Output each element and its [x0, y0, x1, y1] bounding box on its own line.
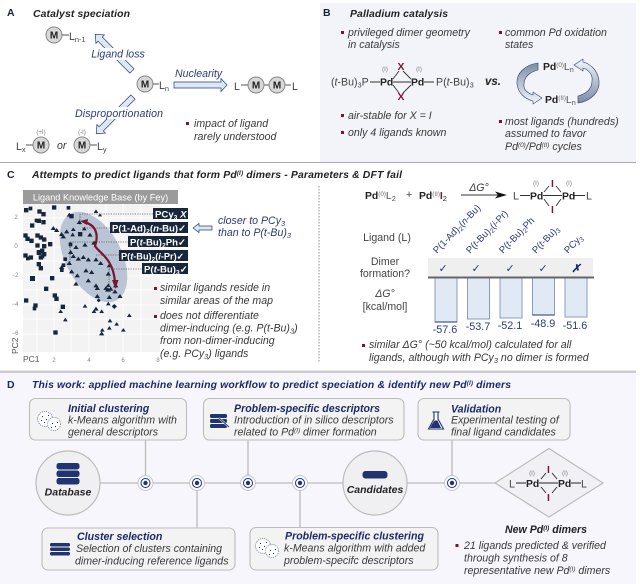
row labels: Ligand (L): [363, 232, 411, 244]
rotated ligand names: [431, 203, 586, 257]
species: M-L n-1: [46, 27, 86, 44]
new dimers caption: New Pd(I) dimers: [505, 524, 587, 536]
species: Lx-M or M-Ly: Ly: [97, 141, 107, 154]
icon: database with wrench: [210, 414, 229, 428]
note: impact of ligand: [186, 118, 278, 143]
arrow: ligand loss: Ligand loss: [91, 48, 145, 60]
icon: database: [56, 463, 80, 484]
reaction scheme: Pd: [562, 192, 575, 202]
species: M-L n: M: [141, 80, 149, 90]
axis labels: 6: [121, 358, 125, 364]
panel A heading: Catalyst speciation: [33, 9, 130, 20]
structure: Pd(I) dimer with X bridges: X: [398, 92, 405, 103]
bullets: most ligands: Pd(0)/Pd(II) cycles: [505, 141, 583, 153]
callout: closer to PCy3: than to P(t-Bu)3: [218, 227, 292, 240]
bullets: dimer geometry: in catalysis: [348, 39, 401, 51]
bullets: oxidation states: common Pd oxidation: [505, 27, 607, 39]
dimer formation row: [428, 258, 593, 277]
catalytic cycle Pd0/PdII: Pd(0)Ln: [543, 62, 574, 74]
data points: [23, 205, 132, 335]
ligand labels on map: P(t-Bu)2Ph✓: [130, 238, 186, 250]
ligand labels on map: [110, 208, 188, 276]
reaction scheme: ΔG°: [468, 182, 489, 194]
dimer L-M-M-L: L: [292, 81, 298, 93]
box: problem-specific clustering: problem-specifc descriptors: [283, 555, 414, 567]
bullets: most ligands: assumed to favor: [505, 128, 587, 140]
bar chart: delta G: -48.9: [531, 318, 555, 330]
structure: Pd(I) dimer with X bridges: [331, 62, 474, 103]
panel A heading: A: [7, 7, 15, 19]
note: impact of ligand: impact of ligand: [194, 118, 269, 130]
timeline nodes: [138, 476, 460, 490]
ligand labels on map: P(1-Ad)2(n-Bu)✓: [112, 224, 186, 236]
box: validation: Experimental testing of: [451, 414, 560, 426]
bullet: similar delta G: similar ΔG° (~50 kcal/mol) calculated for all: [369, 339, 572, 351]
node: candidates: Candidates: [347, 484, 403, 496]
bullets: map observations: similar areas of the map: [160, 295, 273, 307]
reaction scheme: +: [406, 189, 412, 201]
icon: flask: [428, 412, 444, 429]
dimer L-M-M-L: L: [234, 81, 240, 93]
diamond: new dimer structure: Pd: [526, 479, 539, 490]
box: problem-specific clustering: k-Means algorithm with added: [284, 542, 426, 554]
bar chart: delta G: -53.7: [466, 321, 490, 333]
bullets: most ligands: most ligands (hundreds): [505, 116, 619, 128]
axis labels: −4: [12, 302, 19, 308]
icon: clusters: [38, 412, 60, 430]
panel B heading: B: [323, 7, 331, 19]
ligand labels on map: PCy3 X: [155, 210, 187, 222]
panel: palladium catalysis: [320, 3, 636, 162]
axis labels: −2: [12, 273, 19, 279]
box: cluster selection: [42, 528, 235, 570]
node: database: Database: [45, 486, 92, 498]
axis labels: 8: [156, 358, 160, 364]
panel: parameters and DFT fail: [7, 169, 594, 365]
reaction scheme: Pd(0)L2: [365, 191, 396, 203]
structure: Pd(I) dimer with X bridges: (I): [416, 67, 422, 73]
diamond: new dimer structure: (I): [529, 471, 535, 477]
panel: machine learning workflow: [0, 370, 636, 584]
structure: Pd(I) dimer with X bridges: (I): [382, 67, 388, 73]
bullets: air-stable, known ligands: only 4 ligands known: [348, 127, 446, 139]
diamond: new dimer structure: (I): [562, 471, 568, 477]
species: Lx-M or M-Ly: (+I): [36, 130, 46, 136]
dimer L-M-M-L: M: [273, 80, 281, 92]
species: M-L n-1: M: [50, 30, 58, 42]
bullets: air-stable, known ligands: air-stable for X = I: [348, 110, 432, 122]
dimer L-M-M-L: M: [252, 80, 260, 92]
callout: closer to PCy3: [193, 215, 292, 240]
panel B heading: Palladium catalysis: [350, 9, 448, 20]
rotated ligand names: P(t-Bu)3: [530, 224, 563, 257]
axis labels: 4: [87, 358, 91, 364]
bullets: oxidation states: states: [505, 39, 534, 51]
reaction scheme: [365, 179, 592, 216]
reaction scheme: I: [551, 205, 554, 216]
structure: Pd(I) dimer with X bridges: (t-Bu)3P: [331, 76, 369, 90]
bullet: similar delta G: ligands, although with PCy3 no dimer is formed: [369, 352, 590, 365]
ligand labels on map: P(t-Bu)2(i-Pr)✓: [121, 252, 184, 264]
species: Lx-M or M-Ly: [16, 130, 107, 154]
axis labels: PC1: [23, 354, 40, 364]
axis labels: −6: [12, 331, 19, 337]
axis labels: 2: [52, 358, 56, 364]
icon: single disk: [362, 471, 388, 478]
rotated ligand names: PCy3: [562, 233, 586, 257]
arrow: ligand loss: [90, 30, 146, 75]
species: M-L n: Ln: [159, 80, 169, 93]
rotated ligand names: P(1-Ad)2(n-Bu): [431, 203, 484, 257]
axis labels: 2: [14, 215, 18, 221]
row labels: Dimer: [371, 256, 400, 268]
reaction scheme: L: [586, 190, 592, 202]
bullets: map observations: similar ligands reside in: [160, 282, 270, 294]
rotated ligand names: P(t-Bu)2(i-Pr): [464, 209, 511, 257]
bar chart: delta G: -57.6: [433, 324, 457, 336]
Ligand Knowledge Base scatter plot: [10, 190, 178, 364]
reaction scheme: Pd: [530, 192, 543, 202]
icon: clusters: [256, 538, 278, 558]
axis labels: PC2: [10, 337, 20, 354]
callout: closer to PCy3: closer to PCy3: [218, 215, 286, 228]
note: impact of ligand: rarely understood: [194, 131, 278, 143]
dimer formation row: ✓: [471, 263, 481, 275]
bullet: results: through synthesis of 8: [464, 552, 568, 564]
plot title bar: Ligand Knowledge Base (by Fey): [33, 192, 168, 202]
box: problem-specific descriptors: Problem-specific descriptors: [234, 403, 380, 415]
reaction scheme: (I): [566, 181, 572, 187]
row labels: formation?: [360, 268, 410, 280]
diamond: new dimer structure: L: [509, 478, 515, 490]
box: initial clustering: [30, 398, 186, 440]
reaction scheme: I: [551, 179, 554, 190]
box: cluster selection: dimer-inducing reference ligands: [75, 556, 229, 568]
species: M-L n-1: Ln-1: [69, 31, 86, 44]
red trajectory arrow: [84, 222, 115, 282]
axis labels: [10, 215, 160, 364]
bullet: results: [456, 540, 611, 577]
box: cluster selection: Cluster selection: [77, 531, 163, 543]
box: problem-specific descriptors: [204, 398, 404, 440]
rotated ligand names: P(t-Bu)2Ph: [497, 215, 538, 257]
diamond: new dimer structure: L: [581, 478, 587, 490]
catalytic cycle Pd0/PdII: Pd(II)Ln: [545, 95, 576, 107]
species: Lx-M or M-Ly: or: [57, 140, 67, 152]
box: validation: [418, 398, 570, 440]
bullets: most ligands: [499, 116, 619, 153]
arrow: nuclearity: [174, 68, 227, 92]
axis labels: 0: [14, 244, 18, 250]
bullets: map observations: [154, 282, 298, 361]
diamond: new dimer structure: [495, 448, 603, 517]
bar chart: delta G: -52.1: [498, 320, 522, 332]
icon: database: [50, 543, 70, 556]
bullet: results: 21 ligands predicted & verified: [463, 540, 607, 552]
box: validation: Validation: [451, 404, 502, 416]
box: initial clustering: general descriptors: [68, 426, 159, 438]
dotted leaders: [70, 214, 153, 285]
reaction scheme: L: [513, 190, 519, 202]
arrow: nuclearity: Nuclearity: [175, 68, 223, 80]
diamond: new dimer structure: I: [547, 465, 550, 476]
panel C heading: Attempts to predict ligands that form Pd(I) dimers - Parameters & DFT fail: [31, 170, 403, 181]
box: validation: final ligand candidates: [451, 426, 557, 438]
species: Lx-M or M-Ly: M: [37, 140, 45, 152]
structure: Pd(I) dimer with X bridges: P(t-Bu)3: [436, 76, 474, 90]
dimer L-M-M-L: [234, 77, 298, 93]
bullet: results: representative new Pd(I) dimers: [464, 565, 611, 577]
arrow: disproportionation: Disproportionation: [75, 108, 163, 120]
dimer formation row: ✗: [571, 263, 581, 275]
dimer formation row: ✓: [438, 263, 448, 275]
node: candidates: [343, 451, 407, 515]
vs. label: vs.: [485, 76, 501, 88]
structure: Pd(I) dimer with X bridges: X: [398, 62, 405, 73]
bar chart: delta G: [428, 276, 594, 336]
box: problem-specific clustering: Problem-specific clustering: [285, 530, 424, 542]
dimer formation row: ✓: [538, 263, 548, 275]
box: initial clustering: k-Means algorithm with: [68, 414, 177, 426]
reaction scheme: Pd(II)I2: [419, 191, 447, 203]
species: Lx-M or M-Ly: (-I): [78, 130, 86, 136]
bullets: dimer geometry: privileged dimer geometry: [347, 27, 471, 39]
panel B heading: [323, 7, 448, 20]
row labels: [kcal/mol]: [363, 301, 407, 313]
timeline connectors: [100, 440, 495, 528]
box: initial clustering: Initial clustering: [68, 403, 150, 415]
species: Lx-M or M-Ly: Lx: [16, 141, 26, 154]
panel D heading: D: [7, 379, 15, 391]
bullets: map observations: dimer-inducing (e.g. P(t-Bu)3): [160, 322, 298, 336]
species: Lx-M or M-Ly: M: [78, 140, 86, 152]
bullets: dimer geometry: [341, 27, 471, 51]
row labels: [360, 232, 411, 313]
bullets: map observations: does not differentiate: [160, 310, 259, 322]
dimer formation row: ✓: [505, 263, 515, 275]
bullets: map observations: from non-dimer-inducing: [160, 335, 275, 347]
bullets: map observations: (e.g. PCy3) ligands: [160, 348, 249, 361]
box: problem-specific descriptors: Introduction of in silico descriptors: [234, 414, 394, 426]
diamond: new dimer structure: Pd: [558, 479, 571, 490]
panel A heading: [7, 7, 130, 20]
diamond: new dimer structure: I: [547, 493, 550, 504]
panel D heading: This work: applied machine learning workflow to predict speciation & identify new Pd(I) dimers: [32, 380, 511, 391]
bullets: oxidation states: [499, 27, 607, 51]
box: cluster selection: Selection of clusters containing: [76, 543, 222, 555]
structure: Pd(I) dimer with X bridges: Pd: [380, 78, 393, 88]
bullet: similar delta G: [362, 339, 590, 365]
row labels: ΔG°: [374, 288, 395, 300]
reaction scheme: (I): [533, 181, 539, 187]
ligand labels on map: P(t-Bu)3✓: [144, 264, 188, 276]
plot title bar: [23, 190, 178, 204]
bar chart: delta G: -51.6: [563, 320, 587, 332]
species: M-L n: [137, 76, 169, 93]
dashed panel divider: [318, 186, 320, 362]
box: problem-specific descriptors: related to Pd(I) dimer formation: [234, 426, 377, 438]
box: problem-specific clustering: [250, 528, 438, 570]
bullets: air-stable, known ligands: [341, 110, 446, 139]
node: database: [36, 451, 100, 515]
panel: catalyst speciation: [7, 7, 298, 154]
panel C heading: C: [7, 169, 15, 181]
arrow: disproportionation: [74, 93, 164, 138]
structure: Pd(I) dimer with X bridges: Pd: [411, 78, 424, 88]
catalytic cycle Pd0/PdII: [517, 59, 599, 107]
